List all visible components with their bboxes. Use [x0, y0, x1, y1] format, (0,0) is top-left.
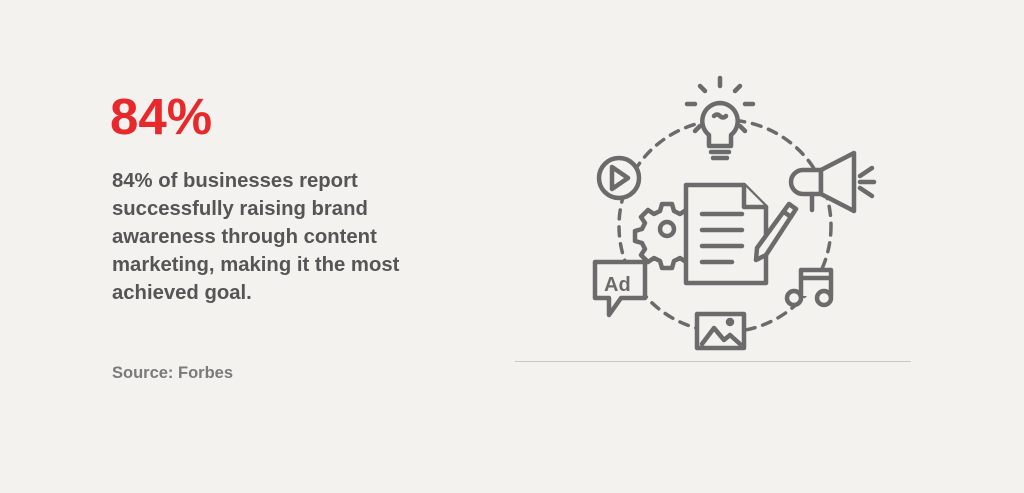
icon: ad bubble — [595, 262, 645, 315]
text block: description: awareness through content — [112, 226, 377, 248]
icon: play button — [599, 158, 639, 198]
icon: ad bubble: Ad — [604, 274, 631, 296]
icon: music note — [787, 270, 831, 305]
source: Source: Forbes — [112, 364, 233, 382]
icon: gear — [635, 204, 699, 268]
text block: description: achieved goal. — [112, 282, 252, 304]
text block: description: 84% of businesses report — [112, 170, 358, 192]
dashed ring — [619, 120, 831, 332]
text block: description: marketing, making it the most — [112, 254, 399, 276]
text block: description — [112, 170, 400, 304]
icon: light bulb — [687, 78, 753, 158]
icon: megaphone — [791, 153, 874, 211]
text block: description: successfully raising brand — [112, 198, 368, 220]
icon: document — [686, 185, 766, 283]
title: 84%: 84% — [110, 88, 212, 145]
icon: pencil — [756, 204, 796, 260]
icon: image — [697, 314, 744, 348]
